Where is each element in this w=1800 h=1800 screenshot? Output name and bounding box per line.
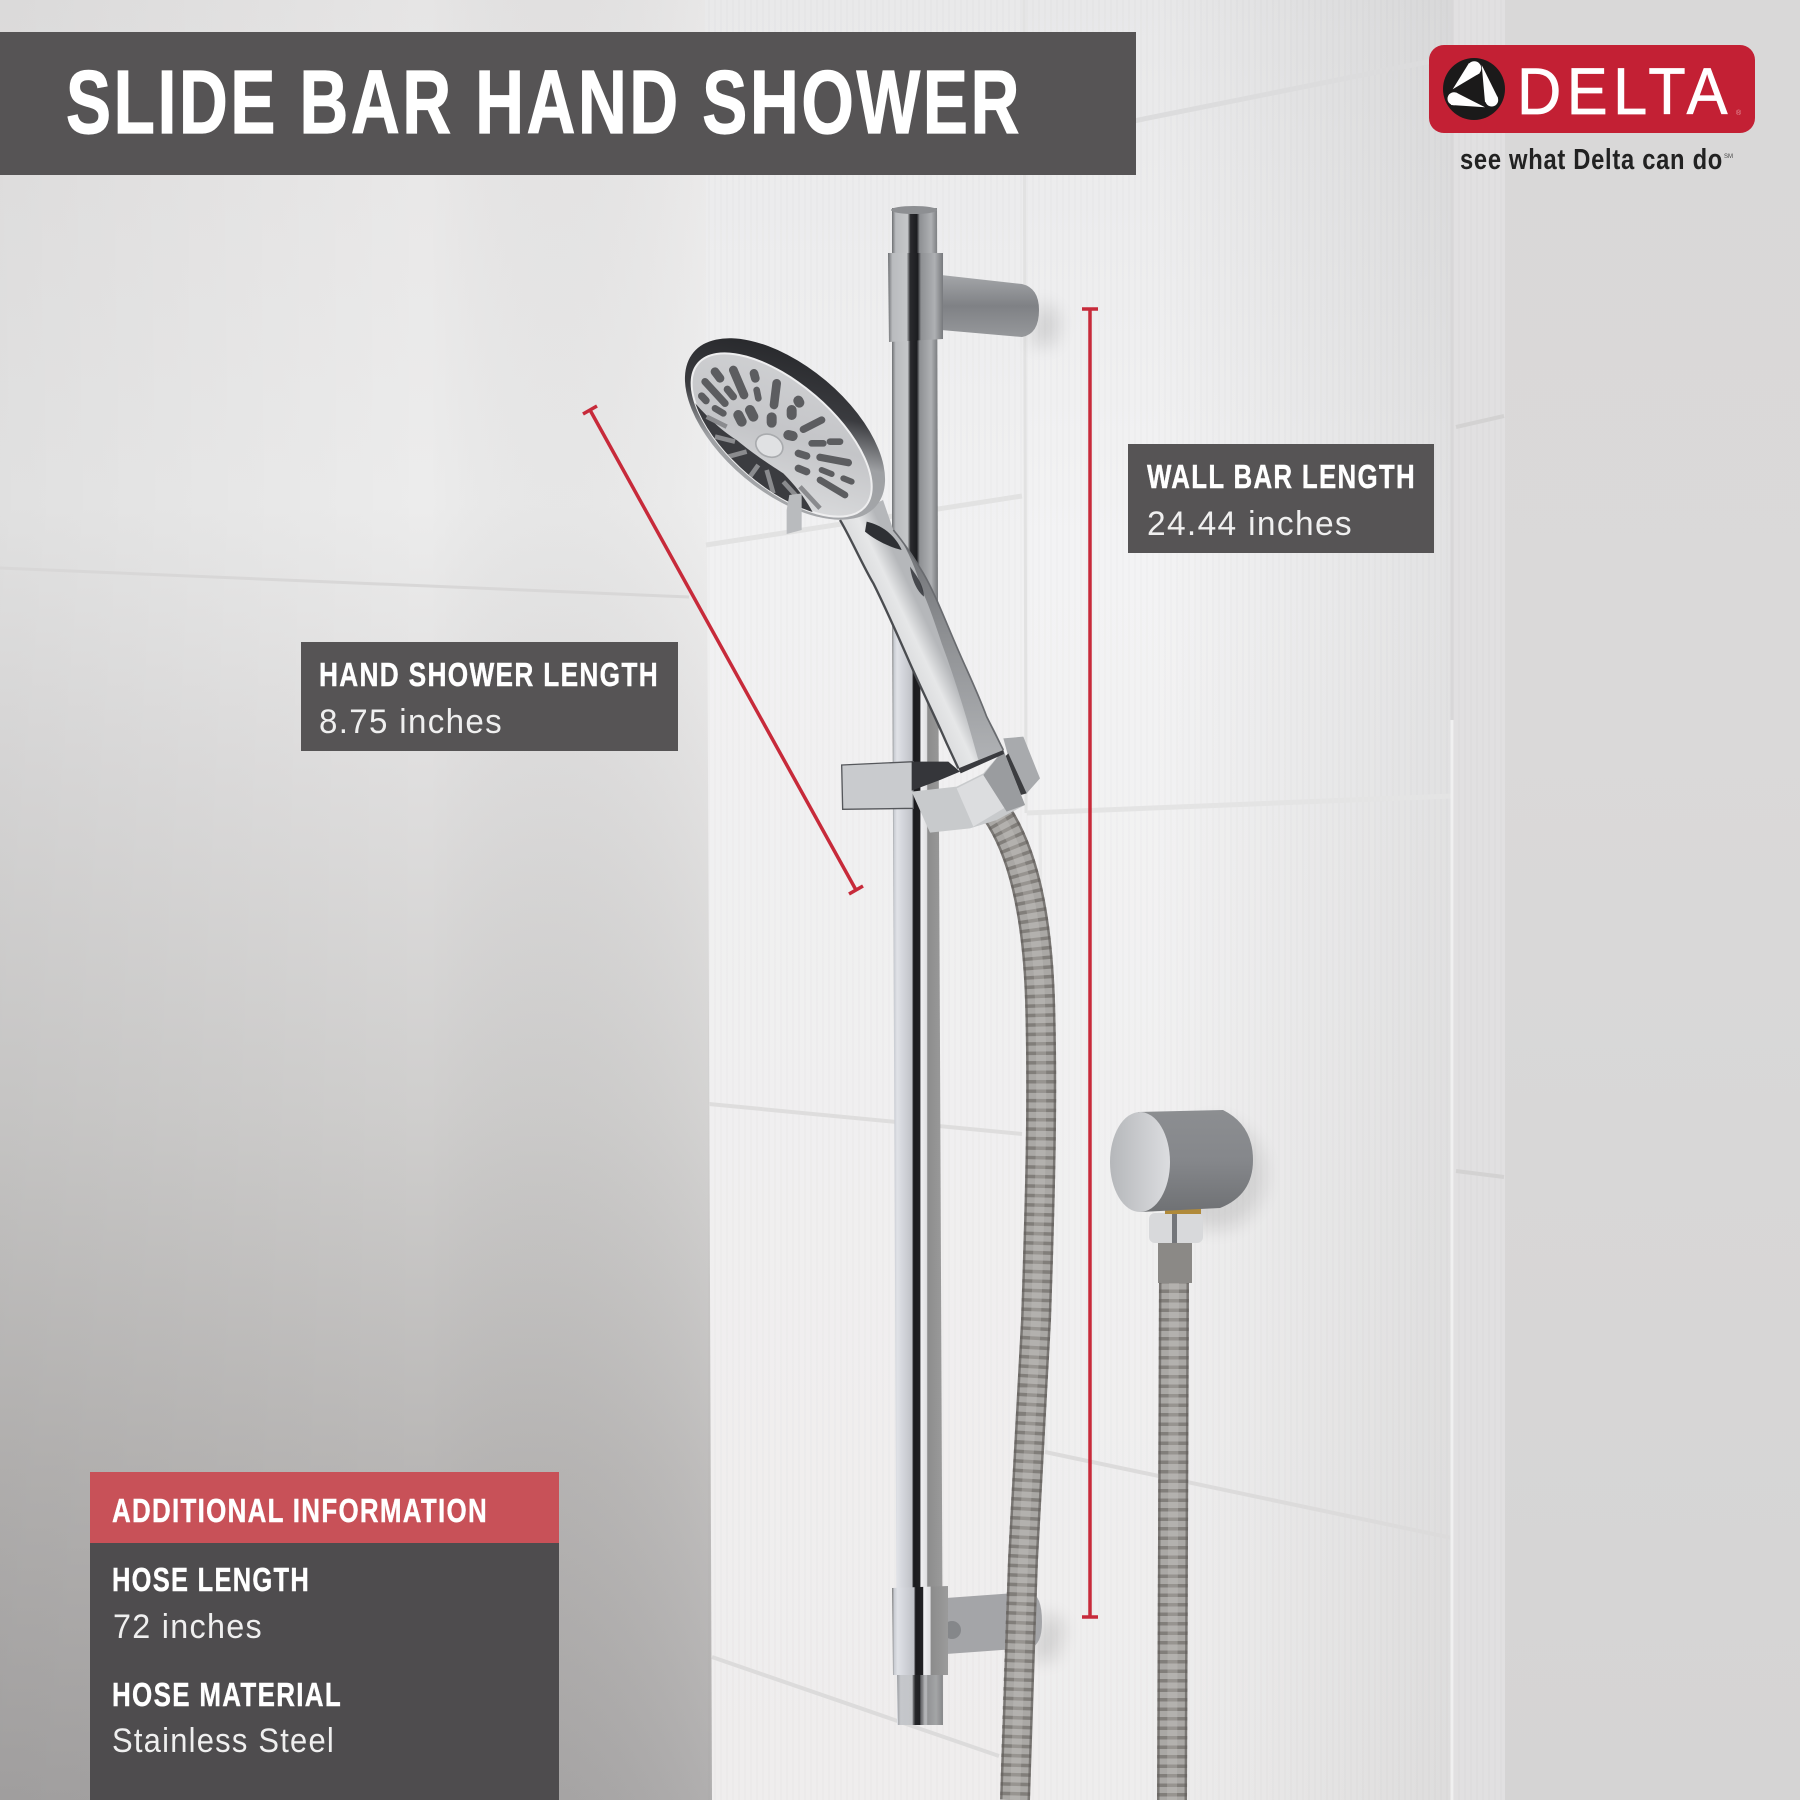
dimension line: wall bar length xyxy=(1082,309,1098,1617)
callout: wall bar length: 24.44 inches xyxy=(1147,505,1353,543)
panel body: HOSE LENGTH xyxy=(112,1561,310,1598)
icon: Delta triangle mark xyxy=(1443,58,1505,120)
callout: hand shower length xyxy=(301,642,678,751)
product: hand shower handle xyxy=(840,500,1040,833)
callout: wall bar length: WALL BAR LENGTH xyxy=(1147,458,1416,495)
Delta logo: ® xyxy=(1736,109,1742,117)
product: slide bar rail xyxy=(888,206,1065,1725)
title banner: SLIDE BAR HAND SHOWER xyxy=(66,53,1022,153)
Delta logo: DELTA xyxy=(1517,54,1733,128)
top collar xyxy=(888,253,943,342)
wall connector xyxy=(1110,1110,1265,1800)
panel body: 72 inches xyxy=(113,1608,263,1646)
callout: hand shower length: HAND SHOWER LENGTH xyxy=(319,656,659,693)
spray nozzles xyxy=(702,370,852,495)
bottom wall bracket xyxy=(943,1592,1042,1654)
shower clip holder xyxy=(842,737,1040,833)
product: shower head xyxy=(684,338,886,534)
panel: additional information xyxy=(90,1472,559,1800)
panel body xyxy=(90,1543,559,1800)
product: stainless steel hose from hand shower xyxy=(996,812,1041,1800)
bottom collar xyxy=(892,1586,948,1675)
stainless steel hose from connector xyxy=(1172,1280,1174,1800)
panel body: Stainless Steel xyxy=(112,1722,335,1760)
tagline: see what Delta can do xyxy=(1460,144,1723,176)
dimension line: hand shower length xyxy=(583,406,863,894)
callout: wall bar length xyxy=(1128,444,1434,553)
panel heading xyxy=(90,1472,559,1543)
hook xyxy=(787,493,802,534)
panel heading: ADDITIONAL INFORMATION xyxy=(112,1492,488,1529)
title banner xyxy=(0,32,1136,175)
Delta logo: SM xyxy=(1724,154,1733,160)
panel body: HOSE MATERIAL xyxy=(112,1676,342,1713)
top wall bracket xyxy=(941,275,1039,337)
callout: hand shower length: 8.75 inches xyxy=(319,703,503,741)
Delta logo xyxy=(1429,45,1755,176)
